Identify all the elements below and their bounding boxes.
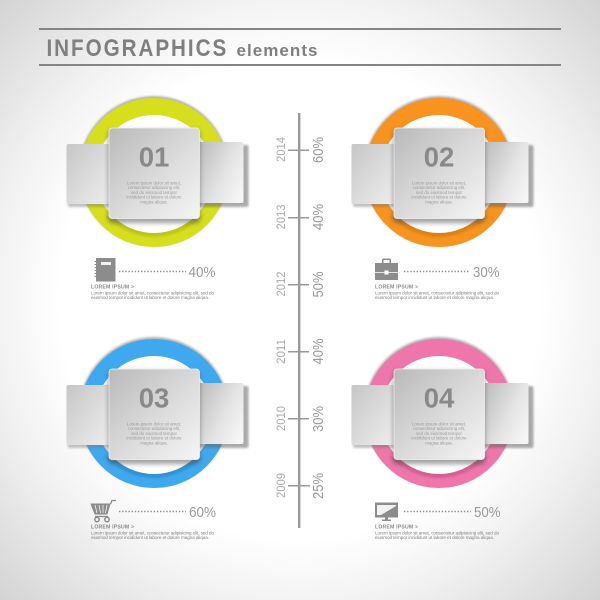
stat heading: LOREM IPSUM > [375,524,418,530]
card [393,128,485,223]
dotted leader [119,270,186,272]
icon: briefcase [375,258,398,280]
card [108,128,200,223]
stat text: Lorem ipsum dolor sit amet, consectetur adipisicing elit, sed do [91,290,214,296]
tick 2013 [274,204,327,230]
card text: magna aliqua. [425,199,453,204]
tick 2013: 2013 [274,204,288,230]
card text: incididunt ut labore et dolore [126,195,182,200]
timeline [274,113,327,528]
tick 2013: 40% [310,204,327,230]
percent: 40% [188,264,216,281]
tick 2009 [274,473,327,499]
card text: consectetur adipisicing elit, [128,426,180,431]
right tab [480,142,534,207]
header top rule [39,28,561,30]
panel: 04 [352,337,534,488]
stat: 03 [91,500,216,540]
tick 2014: 2014 [274,137,288,162]
tick 2010 [274,406,327,432]
right tab [480,383,534,448]
stat text: eiusmod tempor incididunt ut labore et dolore magna aliqua. [375,535,494,540]
panel: 03 [66,337,248,488]
stat text: Lorem ipsum dolor sit amet, consectetur adipisicing elit, sed do [375,290,499,296]
tick 2012 [274,271,327,298]
card text: incididunt ut labore et dolore [126,436,182,441]
header [39,28,561,66]
stat text: eiusmod tempor incididunt ut labore et dolore magna aliqua. [91,295,209,300]
dotted leader [404,270,470,272]
tick 2010: 30% [310,406,327,432]
ring: blue [79,337,229,488]
stat text: Lorem ipsum dolor sit amet, consectetur adipisicing elit, sed do [91,530,214,536]
tick 2009: 25% [310,473,327,499]
left tab [352,144,398,207]
card text: incididunt ut labore et dolore [411,195,467,200]
tick 2012: 50% [310,272,327,298]
timeline axis [298,113,300,528]
card text: magna aliqua. [140,199,168,204]
tick 2009: 2009 [274,473,288,498]
tick 2014: 60% [310,137,327,163]
header bottom rule [39,64,561,66]
tick 2011 [274,338,327,364]
tick 2010: 2010 [274,406,288,431]
tick 2011: 2011 [274,339,288,364]
card text: incididunt ut labore et dolore [411,436,467,441]
icon: notebook [94,258,116,282]
card text: consectetur adipisicing elit, [128,185,180,190]
card text: Lorem ipsum dolor sit amet, [127,422,181,426]
card text: sed do eiusmod tempor [131,190,177,195]
card text: sed do eiusmod tempor [416,431,462,436]
card text: Lorem ipsum dolor sit amet, [127,180,181,186]
title: INFOGRAPHICS [46,35,226,61]
card text: sed do eiusmod tempor [416,190,462,195]
percent: 50% [474,504,500,521]
right tab [195,142,248,207]
card text: consectetur adipisicing elit, [413,185,465,190]
stat heading: LOREM IPSUM > [375,284,418,290]
card text: sed do eiusmod tempor [131,431,177,436]
card text: Lorem ipsum dolor sit amet, [412,422,466,426]
panel: 02 [352,96,534,247]
card text: magna aliqua. [140,440,168,445]
stat text: Lorem ipsum dolor sit amet, consectetur adipisicing elit, sed do [375,530,499,536]
card [393,369,485,464]
panel: 01 [66,96,248,247]
stat heading: LOREM IPSUM > [91,524,134,530]
stat text: eiusmod tempor incididunt ut labore et dolore magna aliqua. [375,295,494,300]
card text: magna aliqua. [425,440,453,445]
tick 2011: 40% [310,338,327,364]
card text: consectetur adipisicing elit, [413,426,465,431]
tick 2012: 2012 [274,271,288,296]
card [108,369,200,464]
dotted leader [119,510,186,512]
ring: pink [364,337,514,488]
percent: 30% [473,264,500,281]
left tab [352,385,398,448]
stat: 01 [91,258,216,300]
number: 02 [424,142,454,172]
number: 01 [139,142,169,172]
card text: Lorem ipsum dolor sit amet, [412,180,466,186]
number: 03 [139,382,169,414]
left tab [66,385,112,448]
number: 04 [424,382,455,414]
dotted leader [404,510,471,512]
stat: 02 [375,258,500,300]
icon: monitor [375,502,398,521]
stat text: eiusmod tempor incididunt ut labore et dolore magna aliqua. [91,535,209,540]
stat: 04 [375,502,500,540]
icon: shopping cart [91,500,116,522]
stat heading: LOREM IPSUM > [91,284,134,290]
subtitle: elements [236,41,318,60]
right tab [195,383,248,448]
tick 2014 [274,137,327,163]
left tab [66,144,112,207]
ring: lime [79,96,229,247]
ring: orange [364,96,514,247]
percent: 60% [189,504,216,521]
